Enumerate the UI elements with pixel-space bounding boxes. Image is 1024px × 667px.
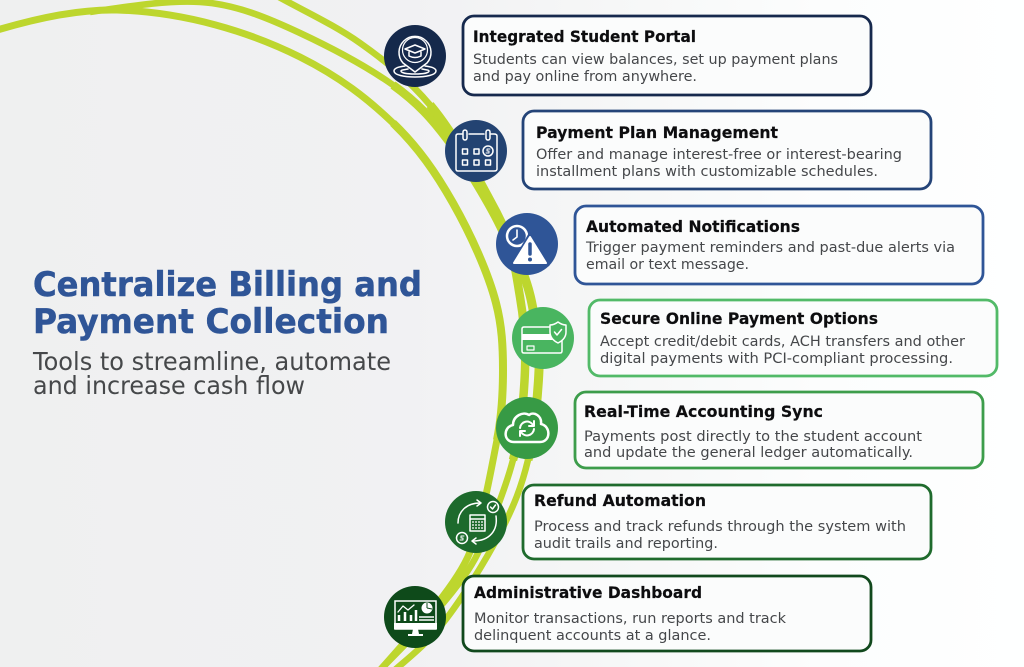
- heading: administrative dashboard: Administrative Dashboard: [474, 583, 702, 602]
- text: refund automation description: [534, 519, 906, 552]
- text: automated notifications description: email or text message.: [586, 257, 749, 273]
- text: refund automation description: audit trails and reporting.: [534, 536, 718, 552]
- text: secure online payment description: Accept credit/debit cards, ACH transfers and other: [600, 334, 965, 350]
- heading: real-time accounting sync: Real-Time Accounting Sync: [584, 402, 823, 421]
- panel: real-time accounting sync: [575, 392, 983, 468]
- title: Centralize Billing and: [33, 265, 422, 304]
- subtitle: Tools to streamline, automate: [32, 347, 391, 376]
- panel: secure online payment options: [589, 300, 997, 376]
- text: payment plan description: Offer and manage interest-free or interest-bearing: [536, 147, 902, 163]
- heading: automated notifications: Automated Notifications: [586, 217, 800, 236]
- icon: refund cycle: [445, 491, 507, 553]
- text: secure online payment description: [600, 334, 965, 367]
- text: integrated student portal description: [473, 52, 838, 85]
- panel: payment plan management: [523, 111, 931, 189]
- text: secure online payment description: digital payments with PCI-compliant processing.: [600, 351, 953, 367]
- panel: automated notifications: [575, 206, 983, 284]
- panel: refund automation: [523, 485, 931, 559]
- subtitle: [32, 347, 391, 400]
- text: real-time accounting description: Payments post directly to the student account: [584, 429, 923, 445]
- text: automated notifications description: Trigger payment reminders and past-due alerts via: [585, 240, 955, 256]
- text: payment plan description: installment plans with customizable schedules.: [536, 164, 878, 180]
- text: refund automation description: Process and track refunds through the system with: [534, 519, 906, 535]
- icon: graduation cap location pin: [384, 25, 446, 87]
- heading: integrated student portal: Integrated Student Portal: [473, 27, 696, 46]
- icon: dashboard monitor: [384, 586, 446, 648]
- decorative green arcs: [0, 0, 539, 667]
- text: real-time accounting description: [584, 429, 923, 461]
- text: automated notifications description: [585, 240, 955, 273]
- text: payment plan description: [536, 147, 902, 180]
- icon: credit card with shield: [512, 307, 574, 369]
- heading: payment plan management: Payment Plan Management: [536, 123, 778, 142]
- panel: integrated student portal: [463, 16, 871, 95]
- panel: administrative dashboard: [463, 576, 871, 651]
- icon: cloud sync: [496, 397, 558, 459]
- title: [33, 265, 422, 341]
- text: administrative dashboard description: delinquent accounts at a glance.: [474, 628, 711, 644]
- heading: secure online payment options: Secure Online Payment Options: [600, 309, 878, 328]
- text: administrative dashboard description: Monitor transactions, run reports and track: [474, 611, 787, 627]
- icon: clock and warning triangle: [496, 213, 558, 275]
- text: integrated student portal description: Students can view balances, set up payment plans: [473, 52, 838, 68]
- text: integrated student portal description: and pay online from anywhere.: [473, 69, 697, 85]
- text: real-time accounting description: and update the general ledger automatically.: [584, 445, 913, 461]
- heading: refund automation: Refund Automation: [534, 491, 706, 510]
- title: Payment Collection: [33, 302, 389, 341]
- icon: payment calendar: [445, 120, 507, 182]
- subtitle: and increase cash flow: [33, 371, 305, 400]
- text: administrative dashboard description: [474, 611, 787, 644]
